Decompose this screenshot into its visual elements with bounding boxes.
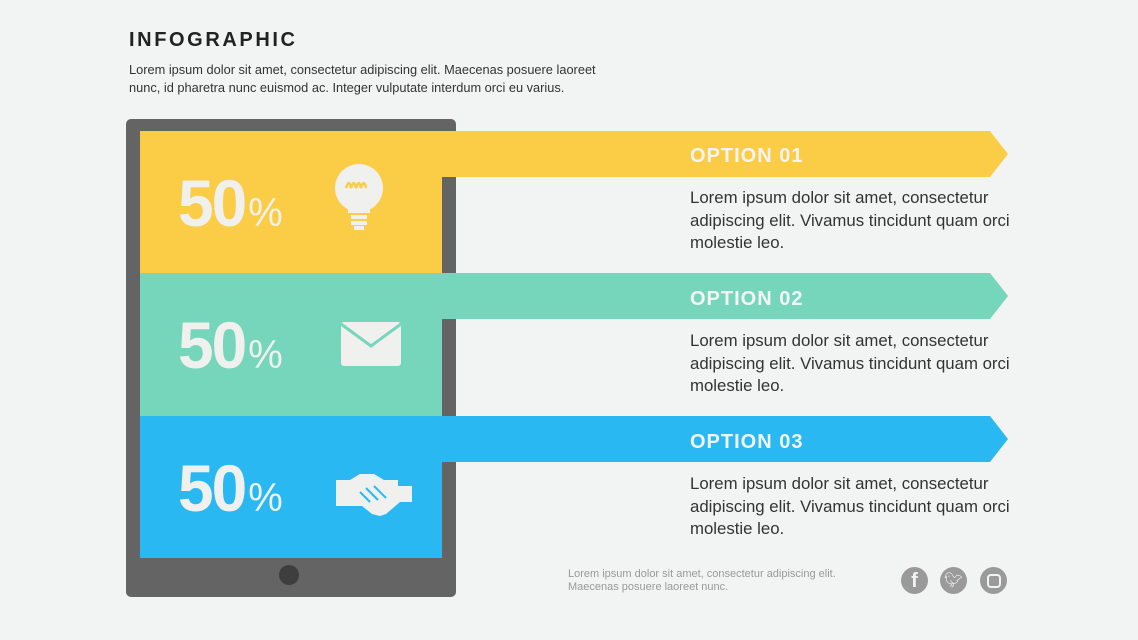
option 1 text: Lorem ipsum dolor sit amet, consectetur adipiscing elit. Vivamus tincidunt quam orci molestie leo. — [690, 188, 1010, 252]
icon: instagram — [980, 567, 1007, 594]
icon: light bulb — [335, 164, 383, 230]
option 3 text: Lorem ipsum dolor sit amet, consectetur adipiscing elit. Vivamus tincidunt quam orci molestie leo. — [690, 474, 1010, 538]
panel: option 3 band — [140, 416, 442, 558]
footer text — [568, 568, 836, 593]
percent 1: 50% — [178, 166, 283, 240]
subtitle: Lorem ipsum dolor sit amet, consectetur adipiscing elit. Maecenas posuere laoreet nunc, id pharetra nunc euismod ac. Integer vulputate interdum orci eu varius. — [129, 62, 596, 94]
title: INFOGRAPHIC — [129, 29, 298, 51]
icons: social — [901, 567, 1007, 594]
banner: option 2 — [442, 273, 1008, 319]
option 1 heading: OPTION 01 — [690, 145, 803, 167]
panel: option 2 band — [140, 273, 442, 416]
banner: option 3 — [442, 416, 1008, 462]
option 2 heading: OPTION 02 — [690, 288, 803, 310]
footer text: Lorem ipsum dolor sit amet, consectetur adipiscing elit. — [568, 568, 836, 580]
icon: facebook: f — [911, 570, 918, 592]
percent 3: 50% — [178, 451, 283, 525]
percent 2: 50% — [178, 308, 283, 382]
footer text: Maecenas posuere laoreet nunc. — [568, 581, 728, 593]
option 3 heading: OPTION 03 — [690, 431, 803, 453]
icon: envelope — [341, 322, 401, 366]
icon: twitter — [940, 567, 967, 594]
option 2 text: Lorem ipsum dolor sit amet, consectetur adipiscing elit. Vivamus tincidunt quam orci molestie leo. — [690, 331, 1010, 395]
icon: facebook — [901, 567, 928, 594]
banner: option 1 — [442, 131, 1008, 177]
icon: twitter: 🐦︎ — [944, 572, 963, 589]
panel: option 1 band — [140, 131, 442, 273]
icon: handshake — [336, 474, 412, 516]
tablet device — [126, 119, 456, 597]
home button — [279, 565, 299, 585]
